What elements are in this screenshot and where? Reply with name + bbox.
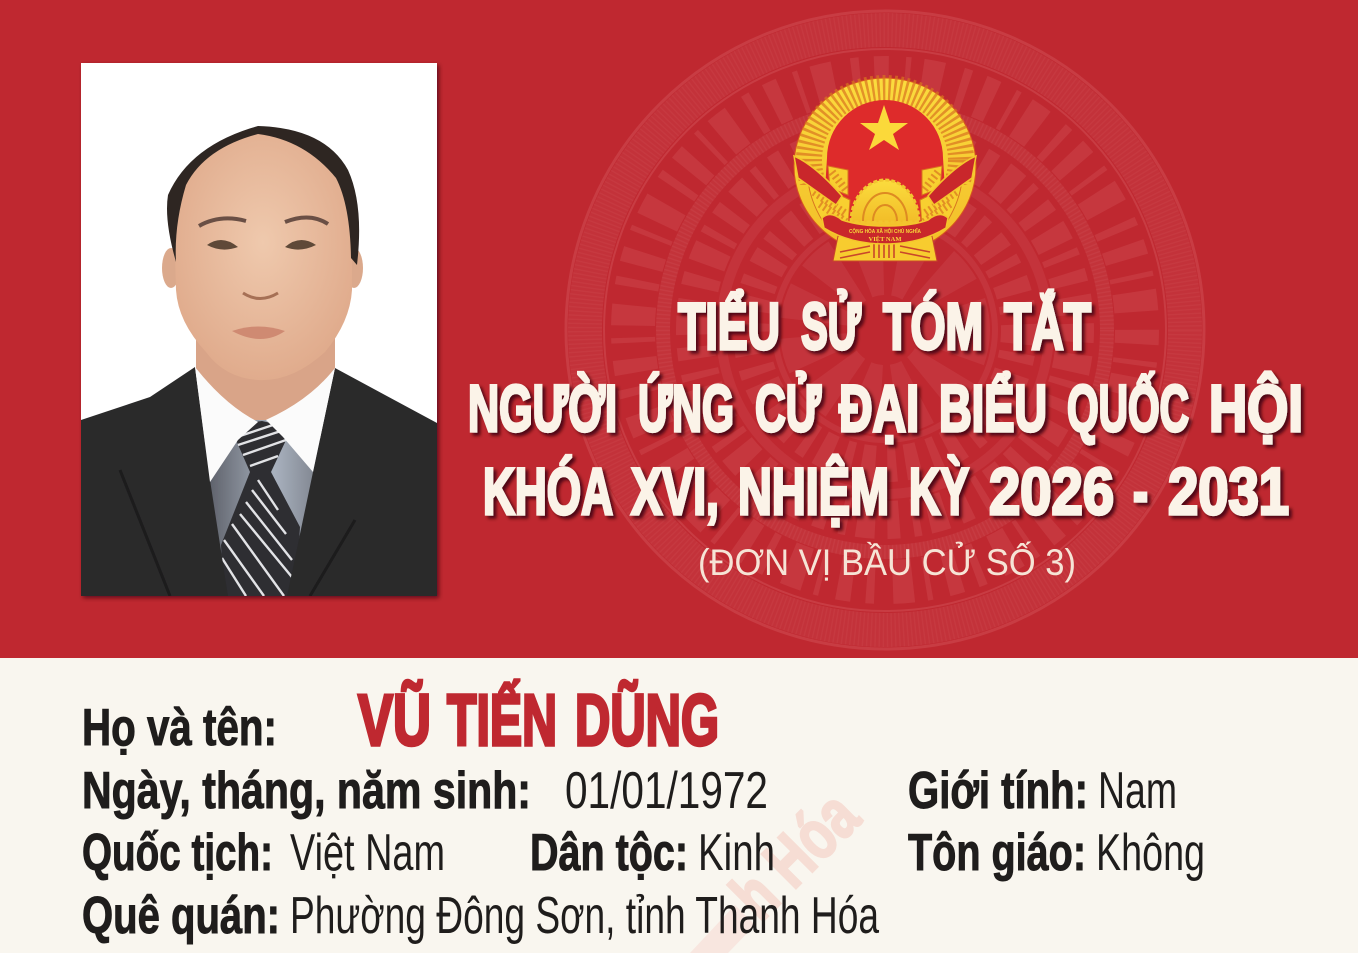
right ribbon [928,156,976,205]
label: hometown: Quê quán: [82,887,280,945]
gold star [860,105,908,150]
left wheat cluster [808,166,850,226]
hometown: Phường Đông Sơn, tỉnh Thanh Hóa [290,887,879,945]
wheat grain texture [796,75,974,185]
hair [167,126,359,265]
title line 2 [468,371,1303,445]
left ribbon [794,156,842,205]
nationality: Việt Nam [290,824,445,882]
right wheat cluster [920,166,962,226]
title line 2: HỘI [1209,371,1303,445]
collar [195,367,335,482]
gender: Nam [1098,762,1177,820]
label: date of birth: Ngày, tháng, năm sinh: [82,762,531,820]
watermark: h Hóa [716,776,874,934]
label: gender: Giới tính: [908,762,1088,820]
title line 1: SỬ [801,289,861,363]
banner name: VIỆT NAM [869,235,901,243]
portrait photo [81,63,437,596]
ears [162,248,176,288]
label: full name: Họ và tên: [82,699,277,757]
neck [196,335,335,422]
pedestal stripes [840,243,930,258]
title line 3: XVI, [631,454,719,528]
title line 3: - [1133,454,1148,528]
title line 1 [678,289,1091,363]
shirt front [205,420,320,557]
main title [468,289,1303,528]
title line 3: KHÓA [483,454,613,528]
title line 2: ĐẠI [839,371,919,445]
candidate name: TIẾN [447,680,557,761]
title line 1: TẮT [1004,289,1091,363]
title line 2: QUỐC [1067,371,1189,445]
title line 1: TÓM [883,289,983,363]
religion: Không [1096,824,1205,882]
candidate name: VŨ [358,680,431,761]
tie stripes [222,424,296,596]
candidate name [358,680,719,761]
tie [221,421,300,596]
eyes [207,240,316,250]
title line 3: NHIỆM [738,454,889,528]
subtitle: (ĐƠN VỊ BẦU CỬ SỐ 3) [698,541,1076,583]
date of birth: 01/01/1972 [565,762,768,820]
suit jacket [81,367,437,596]
gear [851,180,919,222]
face [174,130,352,380]
candidate name: DŨNG [575,680,719,761]
ethnicity: Kinh [698,824,775,882]
nose [243,293,278,298]
gold wreath [794,78,976,254]
watermark band [690,905,755,953]
eyebrows [199,217,328,226]
label: ethnicity: Dân tộc: [530,824,688,882]
title line 2: BIỂU [939,371,1047,445]
label: nationality: Quốc tịch: [82,824,273,882]
bronze drum watermark [566,11,1204,649]
pedestal [833,236,937,261]
jacket lapel shading [120,470,355,596]
red inner field [825,100,945,222]
title line 1: TIỂU [678,289,780,363]
wheat cluster grain texture [814,172,956,222]
title line 3 [483,454,1289,528]
title line 3: 2031 [1168,454,1289,528]
gear arcs [863,193,907,221]
red header panel [0,0,1358,658]
label: religion: Tôn giáo: [908,824,1086,882]
title line 2: CỬ [755,371,821,445]
title line 2: NGƯỜI [468,371,617,445]
title line 2: ỨNG [638,371,734,445]
bottom banner [822,214,948,244]
title line 3: KỲ [909,454,969,528]
title line 3: 2026 [989,454,1114,528]
info panel [0,658,1358,953]
mouth [232,326,285,339]
national emblem [794,78,976,261]
banner text: CỘNG HÒA XÃ HỘI CHỦ NGHĨA [849,227,921,235]
